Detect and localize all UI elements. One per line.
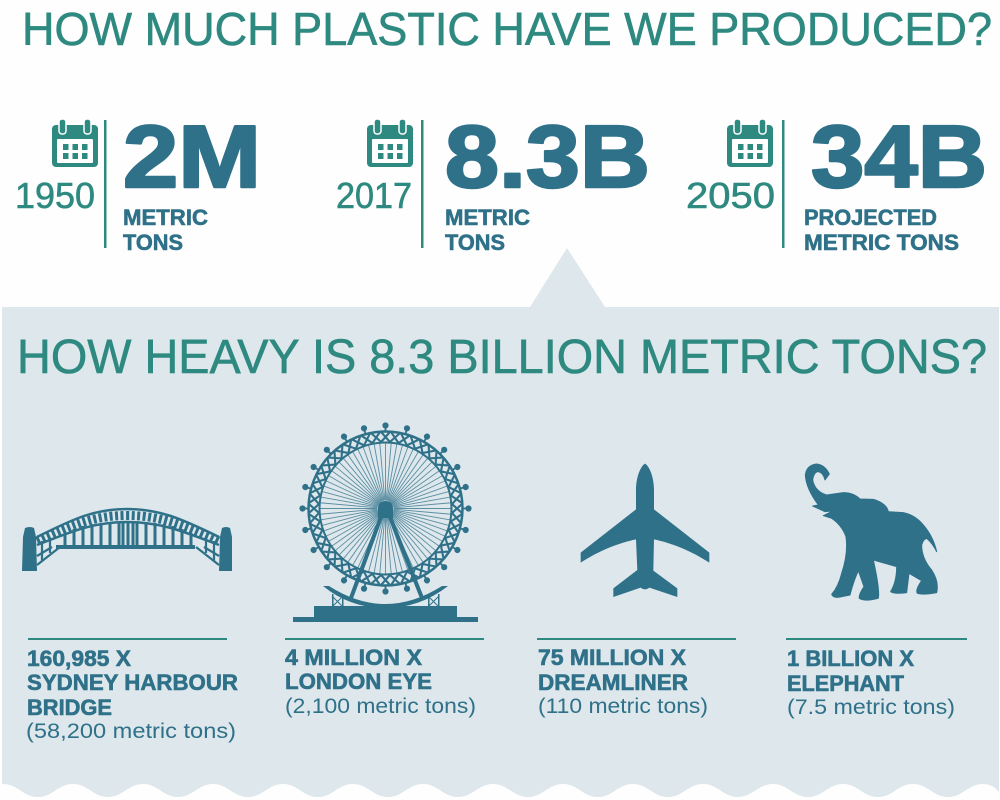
- icon: calendar 2050: [727, 119, 773, 167]
- label: 4 MILLION X: [285, 645, 422, 670]
- rule: [285, 638, 484, 640]
- divider 2017: [421, 120, 424, 248]
- unit: projected metric tons: PROJECTED: [804, 205, 937, 230]
- unit: metric tons: TONS: [445, 230, 505, 255]
- rule: [786, 638, 967, 640]
- item: Dreamliner: (110 metric tons): [538, 695, 708, 718]
- icon: Dreamliner airplane: [581, 464, 709, 597]
- stat: 2017: [336, 107, 650, 255]
- label: 75 MILLION X: [538, 645, 686, 670]
- unit: metric tons: METRIC: [123, 205, 208, 230]
- item: Dreamliner: [537, 638, 736, 718]
- wheel spokes and rim: [296, 419, 475, 598]
- icon: Sydney Harbour Bridge: [22, 509, 232, 571]
- icon: calendar 2017: [367, 119, 413, 167]
- icon: London Eye: [293, 419, 478, 622]
- panel heading: HOW HEAVY IS 8.3 BILLION METRIC TONS?: [17, 331, 987, 384]
- stat: 2050: [686, 107, 987, 255]
- year 2017: 2017: [336, 175, 412, 216]
- value 2M: 2M: [123, 107, 261, 206]
- item: Sydney Harbour Bridge: BRIDGE: [27, 695, 112, 720]
- unit: projected metric tons: METRIC TONS: [804, 230, 959, 255]
- stat: 1950: [15, 107, 261, 255]
- item: Sydney Harbour Bridge: SYDNEY HARBOUR: [27, 670, 238, 695]
- rule: [28, 638, 227, 640]
- unit: metric tons: TONS: [123, 230, 183, 255]
- year 1950: 1950: [15, 175, 95, 216]
- item: Dreamliner: DREAMLINER: [538, 670, 688, 695]
- icon: calendar 1950: [52, 119, 98, 167]
- divider 1950: [104, 120, 106, 248]
- icon: elephant: [805, 464, 937, 600]
- item: Sydney Harbour Bridge: (58,200 metric tons): [26, 720, 236, 743]
- item: elephant: (7.5 metric tons): [787, 696, 955, 719]
- panel: how heavy background with pointer and wavy bottom: [2, 248, 999, 797]
- year 2050: 2050: [686, 175, 775, 216]
- value 8.3B: 8.3B: [445, 107, 650, 206]
- label: 1 BILLION X: [787, 646, 914, 671]
- hub, legs and base: [293, 501, 478, 622]
- item: London Eye: (2,100 metric tons): [285, 695, 476, 718]
- unit: metric tons: [123, 205, 208, 255]
- value 34B: 34B: [811, 107, 987, 206]
- divider 2050: [782, 120, 784, 248]
- item: elephant: [786, 638, 967, 719]
- item: London Eye: LONDON EYE: [285, 669, 432, 694]
- item: elephant: ELEPHANT: [787, 671, 905, 696]
- label: 160,985 X: [27, 646, 131, 671]
- unit: metric tons: METRIC: [445, 205, 530, 230]
- unit: projected metric tons: [804, 205, 959, 255]
- item: Sydney Harbour Bridge: [26, 638, 238, 743]
- item: London Eye: [285, 638, 484, 718]
- title: HOW MUCH PLASTIC HAVE WE PRODUCED?: [22, 3, 992, 55]
- unit: metric tons: [445, 205, 530, 255]
- rule: [537, 638, 736, 640]
